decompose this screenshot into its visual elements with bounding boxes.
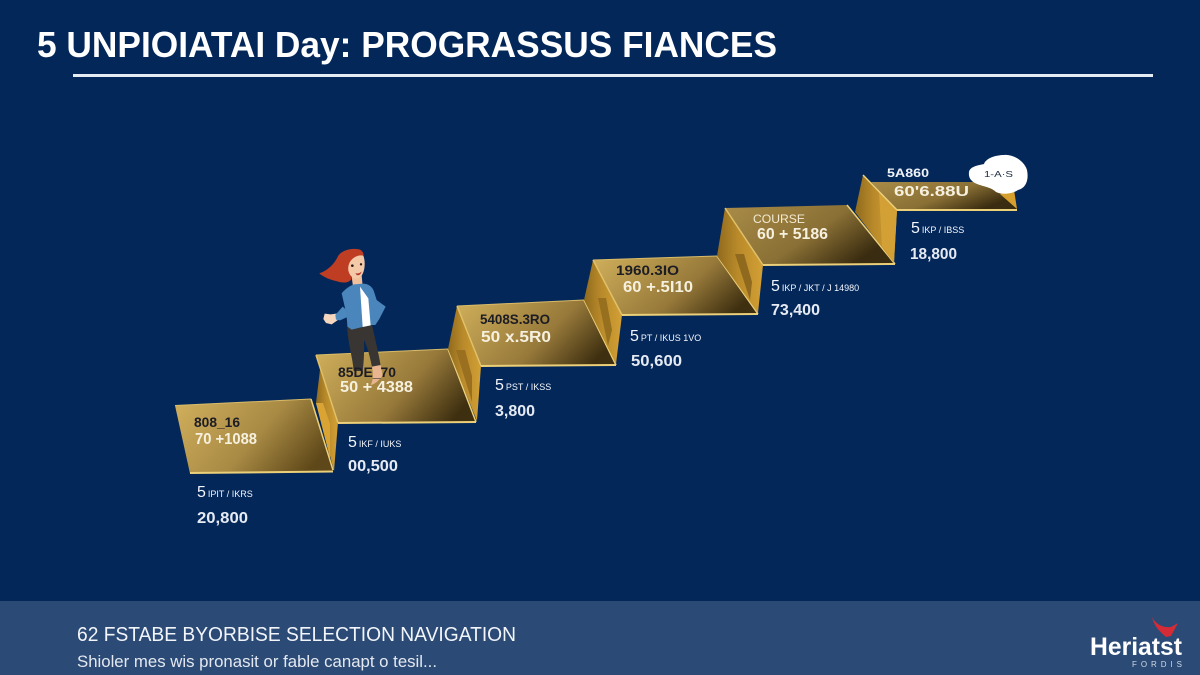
step 5 bbox=[725, 205, 895, 265]
step 6 bbox=[863, 168, 1017, 210]
title: 5 UNPIOIATAI Day: PROGRASSUS FIANCES bbox=[37, 24, 777, 65]
icon: red swoosh bbox=[1152, 617, 1178, 637]
step 3 value bbox=[495, 377, 551, 420]
step 4 bbox=[593, 256, 758, 315]
step 1 bbox=[175, 399, 333, 474]
footer subtext: Shioler mes wis pronasit or fable canapt o tesil... bbox=[77, 652, 437, 671]
step 5 value: 73,400 bbox=[771, 302, 820, 319]
step 2 labels: 85DE_70 bbox=[338, 364, 396, 380]
step 4: 60 +.5I10 bbox=[623, 279, 693, 296]
step 5: COURSE bbox=[753, 214, 805, 226]
step 3: 50 x.5R0 bbox=[481, 329, 551, 346]
step 4: 1960.3IO bbox=[616, 262, 679, 278]
step 1: 808_16 bbox=[194, 414, 240, 430]
step 3 value: 5PST / IKSS bbox=[495, 377, 551, 394]
step 2 labels bbox=[338, 364, 413, 396]
riser 5 bbox=[855, 175, 897, 263]
step 6 value bbox=[910, 220, 964, 263]
riser 4 bbox=[717, 208, 763, 313]
face bbox=[348, 255, 365, 279]
step 5: 60 + 5186 bbox=[757, 226, 828, 243]
step 5 value: 5IKP / JKT / J 14980 bbox=[771, 278, 859, 295]
title bbox=[37, 24, 1153, 77]
step 3: 5408S.3RO bbox=[480, 311, 550, 327]
neck bbox=[352, 275, 363, 289]
step 2 bbox=[316, 349, 476, 423]
step 6: 5A860 bbox=[887, 168, 929, 180]
logo bbox=[1090, 617, 1183, 669]
callout: cloud: 1-A·S bbox=[984, 169, 1013, 179]
staircase chart bbox=[175, 155, 1028, 527]
step 1: 70 +1088 bbox=[195, 431, 257, 448]
step 4 value: 50,600 bbox=[631, 353, 682, 370]
step 4 value bbox=[630, 328, 701, 370]
hair bbox=[319, 249, 363, 283]
shirt bbox=[360, 287, 371, 327]
foot bbox=[371, 365, 383, 385]
jacket bbox=[342, 284, 386, 330]
step 6: 60'6.88U bbox=[894, 183, 969, 200]
step 2 value: 5IKF / IUKS bbox=[348, 434, 401, 451]
hand bbox=[323, 313, 339, 324]
logo: Heriatst bbox=[1090, 633, 1183, 661]
step 2 labels: 50 + 4388 bbox=[340, 379, 413, 396]
step 1 value: 5IPIT / IKRS bbox=[197, 484, 253, 501]
callout: cloud bbox=[969, 155, 1028, 194]
logo: FORDIS bbox=[1132, 660, 1182, 669]
trousers bbox=[347, 325, 381, 371]
character: woman with red hair bbox=[319, 249, 386, 385]
riser 2 bbox=[448, 306, 481, 421]
sleeve bbox=[335, 307, 352, 320]
footer heading: 62 FSTABE BYORBISE SELECTION NAVIGATION bbox=[77, 624, 516, 646]
riser 1 bbox=[316, 370, 338, 471]
step 4 value: 5PT / IKUS 1VO bbox=[630, 328, 701, 345]
riser 3 bbox=[584, 260, 622, 364]
step 3 bbox=[457, 300, 616, 366]
step 3 value: 3,800 bbox=[495, 403, 535, 420]
step 6 value: 18,800 bbox=[910, 246, 957, 263]
footer band bbox=[0, 601, 1200, 675]
step 6 value: 5IKP / IBSS bbox=[911, 220, 964, 237]
step 2 value bbox=[348, 434, 401, 475]
step 2 value: 00,500 bbox=[348, 458, 398, 475]
step 1 value bbox=[197, 484, 253, 527]
step 5 value bbox=[771, 278, 859, 319]
step 1 value: 20,800 bbox=[197, 510, 248, 527]
